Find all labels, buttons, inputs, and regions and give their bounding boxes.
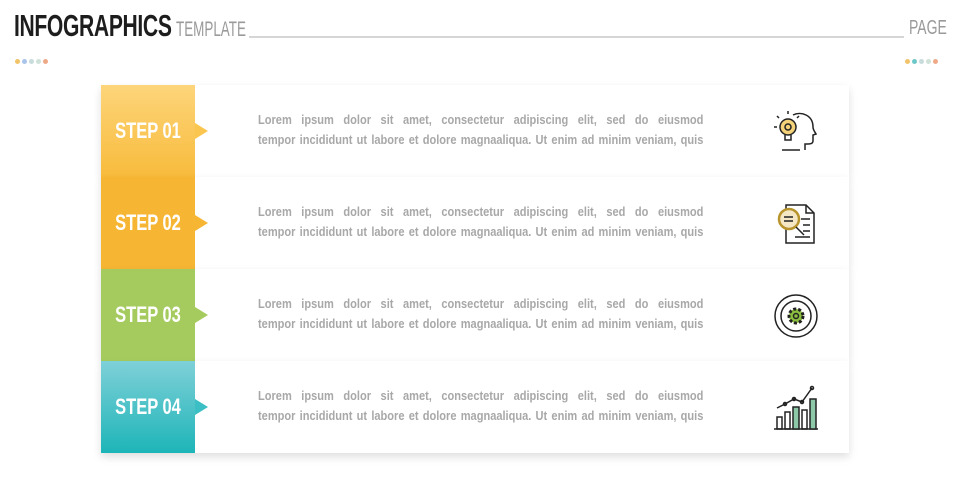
step 3 text: tempor incididunt ut labore et dolore magnaaliqua. Ut enim ad minim veniam, quis [258, 316, 703, 331]
step 3 row [101, 269, 849, 361]
step 1 text: tempor incididunt ut labore et dolore magnaaliqua. Ut enim ad minim veniam, quis [258, 132, 703, 147]
title: INFOGRAPHICS [14, 8, 172, 43]
icon: head with lightbulb [774, 111, 817, 151]
step 1 text: Lorem ipsum dolor sit amet, consectetur adipiscing elit, sed do eiusmod [258, 112, 703, 127]
step 2 tab: STEP 02 [115, 210, 181, 235]
step 2 row [101, 177, 849, 269]
step 3 tab [101, 269, 195, 361]
dots left [15, 59, 48, 64]
icon: bar chart [774, 386, 818, 430]
step 3 tab: STEP 03 [115, 302, 181, 327]
step 3 text: Lorem ipsum dolor sit amet, consectetur adipiscing elit, sed do eiusmod [258, 296, 703, 311]
step 1 tab [101, 85, 195, 177]
step 2 text: tempor incididunt ut labore et dolore magnaaliqua. Ut enim ad minim veniam, quis [258, 224, 703, 239]
step 4 text [258, 388, 703, 423]
subtitle: TEMPLATE [176, 18, 246, 41]
step 1 tab: STEP 01 [115, 118, 181, 143]
page label: PAGE [909, 17, 947, 39]
step 4 text: tempor incididunt ut labore et dolore magnaaliqua. Ut enim ad minim veniam, quis [258, 408, 703, 423]
step 4 tab: STEP 04 [115, 394, 181, 419]
icon: document magnifier [778, 204, 815, 244]
step 1 row [101, 85, 849, 177]
step 1 text [258, 112, 703, 147]
step 2 text: Lorem ipsum dolor sit amet, consectetur adipiscing elit, sed do eiusmod [258, 204, 703, 219]
dots right [905, 59, 938, 64]
step 4 text: Lorem ipsum dolor sit amet, consectetur adipiscing elit, sed do eiusmod [258, 388, 703, 403]
step 2 tab [101, 177, 195, 269]
step 3 text [258, 296, 703, 331]
icon: gear cycle [774, 294, 818, 338]
step 2 text [258, 204, 703, 239]
step 4 tab [101, 361, 195, 453]
step 4 row [101, 361, 849, 453]
